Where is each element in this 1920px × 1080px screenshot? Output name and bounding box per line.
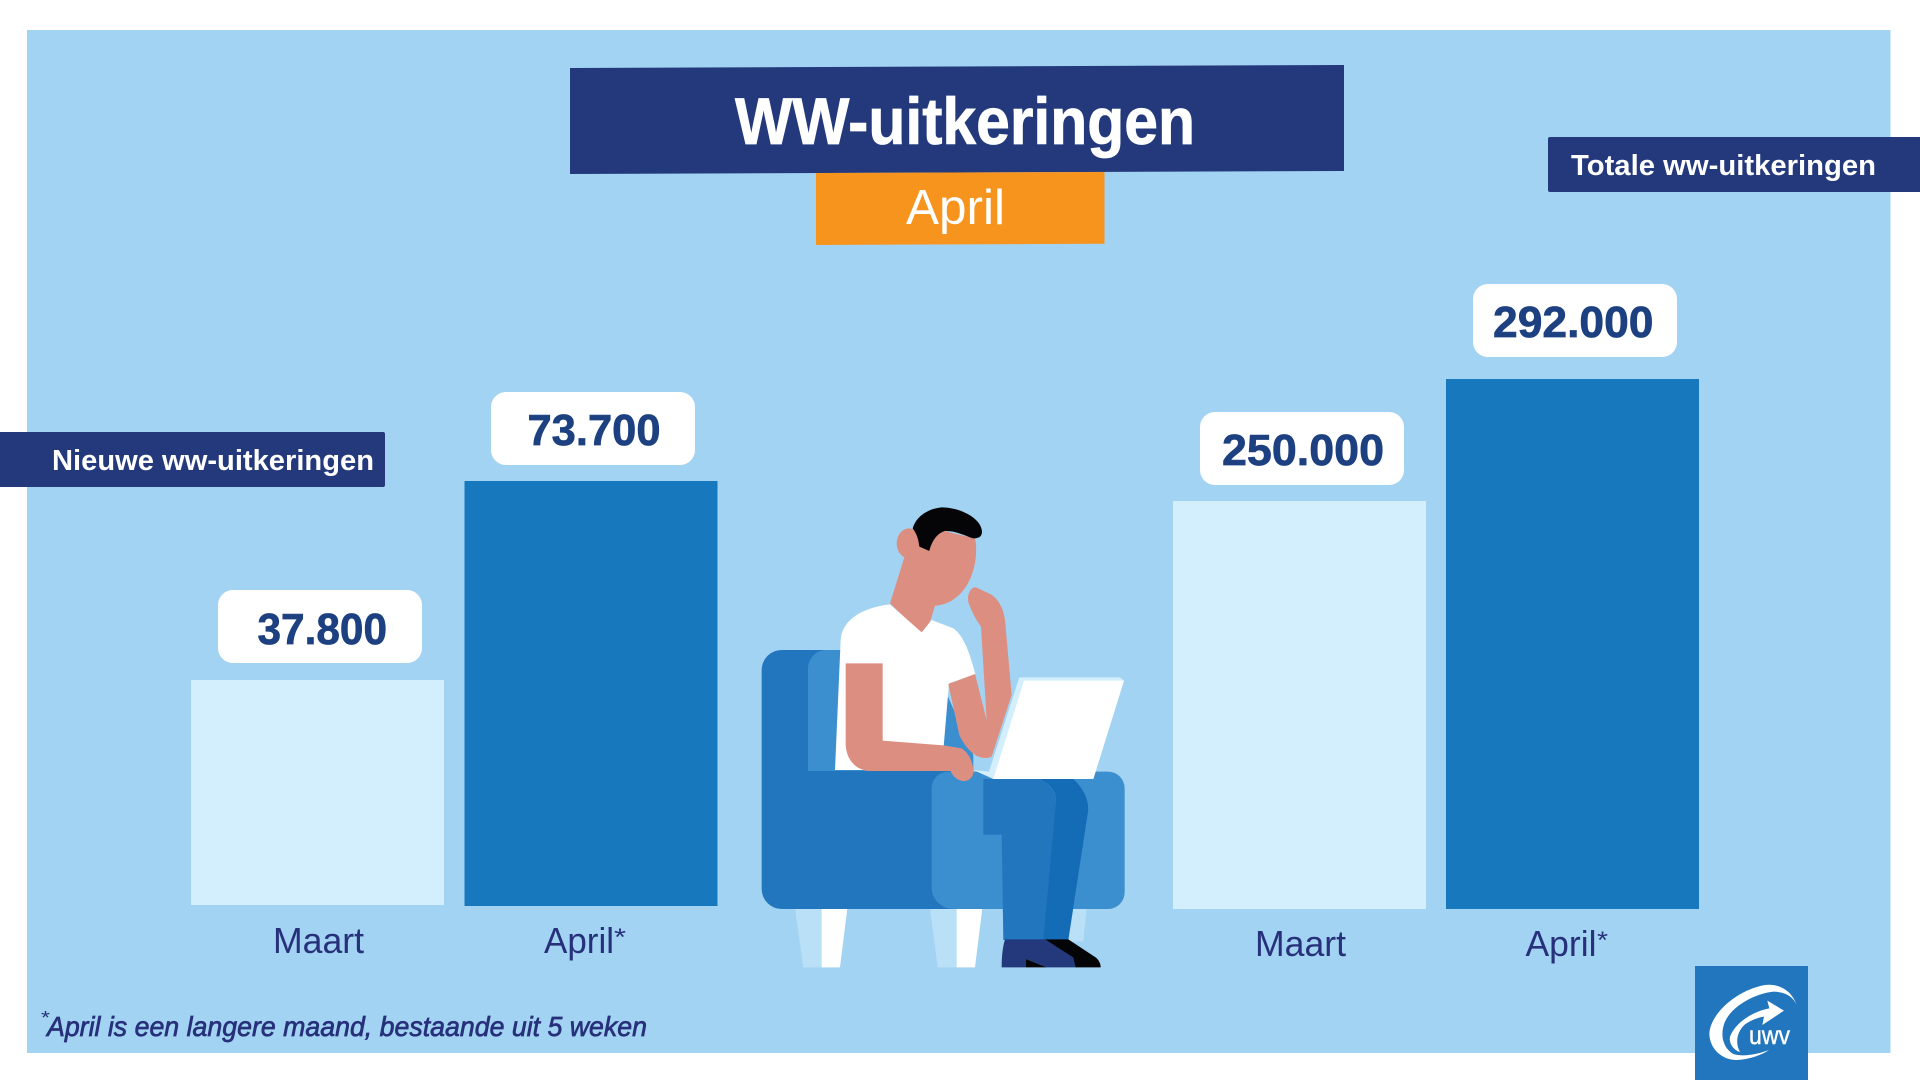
bar: maart 37.800 bbox=[191, 680, 444, 905]
armchair seat cushion bbox=[932, 772, 1125, 909]
arm: raised bbox=[948, 587, 1012, 758]
subtitle: April bbox=[906, 181, 1005, 235]
title block bbox=[570, 65, 1344, 174]
neck and face bbox=[890, 528, 976, 632]
axis label: april: April bbox=[544, 920, 614, 961]
armchair back cushion bbox=[808, 650, 973, 771]
value: 250.000: 250.000 bbox=[1222, 426, 1384, 475]
value: 292.000: 292.000 bbox=[1493, 298, 1654, 347]
subtitle block bbox=[816, 172, 1104, 245]
leg: far bbox=[1040, 779, 1088, 940]
t-shirt bbox=[835, 604, 975, 770]
laptop bbox=[973, 677, 1124, 779]
value: 37.800 bbox=[218, 590, 422, 663]
axis label: maart: Maart bbox=[1255, 923, 1346, 964]
chair legs bbox=[795, 908, 1087, 967]
value: 292.000 bbox=[1473, 284, 1677, 357]
armchair body bbox=[762, 650, 953, 909]
footnote: * bbox=[40, 1008, 50, 1028]
arm: resting bbox=[846, 663, 973, 781]
logo mark bbox=[1709, 985, 1797, 1060]
bar chart: totale ww-uitkeringen bbox=[1173, 284, 1699, 964]
label: nieuwe ww-uitkeringen bbox=[0, 432, 385, 487]
bar: april 73.700 bbox=[464, 481, 718, 906]
value: 73.700: 73.700 bbox=[528, 406, 660, 455]
value: 250.000 bbox=[1200, 412, 1404, 485]
leg: near bbox=[983, 779, 1056, 940]
bar chart: nieuwe ww-uitkeringen bbox=[191, 392, 718, 961]
axis label: maart: Maart bbox=[273, 920, 364, 961]
value: 37.800: 37.800 bbox=[258, 605, 387, 654]
label: totale ww-uitkeringen bbox=[1548, 137, 1920, 192]
label: totale ww-uitkeringen: Totale ww-uitkeringen bbox=[1571, 150, 1876, 182]
value: 73.700 bbox=[491, 392, 695, 465]
footnote: April is een langere maand, bestaande uit 5 weken bbox=[45, 1011, 647, 1042]
hair bbox=[913, 507, 982, 551]
axis label: april: * bbox=[1597, 927, 1608, 954]
axis label: april: * bbox=[614, 924, 626, 951]
bar: maart 250.000 bbox=[1173, 501, 1426, 909]
bar: april 292.000 bbox=[1446, 379, 1699, 909]
label: nieuwe ww-uitkeringen: Nieuwe ww-uitkeringen bbox=[52, 445, 374, 477]
logo text: uwv bbox=[1749, 1020, 1790, 1050]
subtitle bar bbox=[816, 172, 1104, 245]
axis label: april: April bbox=[1526, 923, 1596, 964]
title bar bbox=[570, 65, 1344, 174]
illustration: man with laptop in armchair bbox=[762, 507, 1125, 967]
logo: uwv bbox=[1695, 966, 1808, 1080]
shoes bbox=[1002, 939, 1101, 967]
title: WW-uitkeringen bbox=[735, 84, 1195, 158]
